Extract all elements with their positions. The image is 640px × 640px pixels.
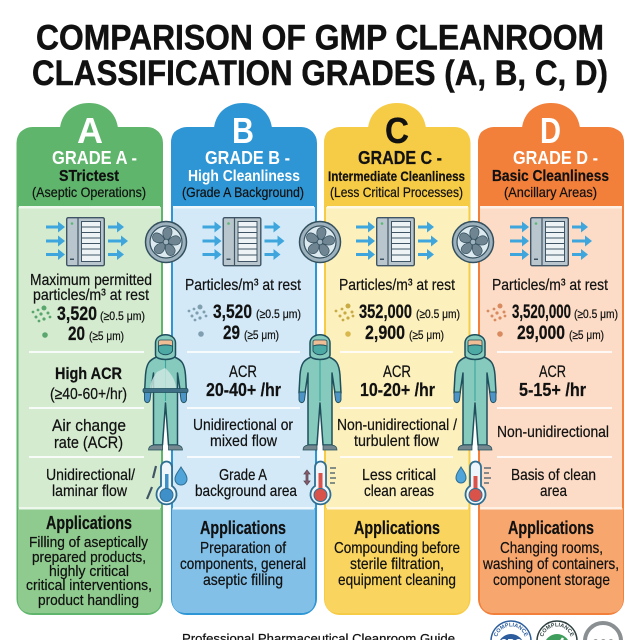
data: 352,000 C: 352,000 bbox=[359, 302, 412, 323]
data: 2,900 C: (≥5 μm) bbox=[409, 328, 444, 342]
text: ACR C: ACR bbox=[383, 362, 411, 381]
text: ACR C bbox=[360, 362, 435, 400]
applications C: equipment cleaning bbox=[338, 572, 456, 589]
applications C: Applications bbox=[354, 518, 440, 538]
applications B: aseptic filling bbox=[203, 572, 283, 589]
text: air change A: Air change bbox=[52, 416, 126, 435]
applications C: sterile filtration, bbox=[350, 556, 444, 573]
text: flow D: Non-unidirectional bbox=[497, 424, 609, 441]
header: grade B bbox=[171, 103, 316, 208]
figure: gowned operator C/D bbox=[454, 335, 496, 450]
icon: water drop A/B bbox=[175, 467, 187, 485]
applications D: component storage bbox=[493, 572, 610, 589]
text: flow A: Unidirectional/ bbox=[46, 467, 135, 484]
header: grade A: (Aseptic Operations) bbox=[32, 184, 146, 200]
data: 3,520 A bbox=[57, 304, 145, 325]
applications A: Filling of aseptically bbox=[29, 534, 148, 551]
applications A: product handling bbox=[38, 592, 139, 609]
text: ACR B: ACR bbox=[229, 362, 257, 381]
text: flow C: turbulent flow bbox=[354, 433, 439, 450]
header: grade D: Basic Cleanliness bbox=[492, 168, 609, 185]
applications D bbox=[480, 507, 623, 613]
data: 20 A bbox=[42, 324, 124, 345]
text: flow B: mixed flow bbox=[210, 433, 277, 450]
data: 3,520 A: 3,520 bbox=[57, 304, 97, 325]
text: area D: area bbox=[540, 483, 567, 500]
applications B bbox=[172, 507, 315, 613]
data: 29 B bbox=[198, 323, 279, 344]
applications B: Applications bbox=[200, 518, 286, 538]
icon: humidity arrow bbox=[304, 470, 310, 485]
text: ACR D bbox=[519, 362, 586, 400]
text: air change A bbox=[52, 416, 126, 452]
icon: fan B/C bbox=[300, 222, 340, 262]
text: area D: Basis of clean bbox=[511, 467, 596, 484]
header: grade D bbox=[478, 103, 624, 208]
header: grade C bbox=[324, 103, 470, 208]
text: flow B bbox=[193, 417, 294, 450]
badge: compliance CBC: COMPLIANCE bbox=[494, 622, 528, 637]
text: area C: clean areas bbox=[364, 483, 434, 500]
applications B: components, general bbox=[180, 556, 306, 573]
icon: HEPA filter D bbox=[510, 218, 592, 266]
header: grade B: GRADE B - bbox=[205, 148, 290, 168]
badge: compliance CBC bbox=[490, 620, 532, 640]
text: ACR A bbox=[50, 364, 127, 403]
data: 20 A: 20 bbox=[68, 324, 85, 345]
icon: HEPA filter A bbox=[46, 218, 128, 266]
text: maximum particles A bbox=[30, 272, 152, 304]
applications A bbox=[18, 507, 161, 613]
data: 3,520,000 D: (≥0.5 μm) bbox=[574, 307, 618, 321]
text: flow B: Unidirectional or bbox=[193, 417, 294, 434]
header: grade D: (Ancillary Areas) bbox=[504, 184, 597, 200]
text: ACR B bbox=[206, 362, 281, 400]
text: flow A bbox=[46, 467, 135, 500]
data: 29,000 D bbox=[497, 323, 604, 344]
header: grade D: D bbox=[540, 110, 561, 151]
applications A: Applications bbox=[46, 513, 132, 533]
icon: thermometer A/B bbox=[157, 462, 176, 504]
header: grade C: (Less Critical Processes) bbox=[330, 184, 463, 200]
icon: particle cluster B bbox=[188, 304, 207, 321]
badge: compliance GSC bbox=[585, 623, 621, 640]
data: 3,520 B bbox=[213, 302, 301, 323]
text: area B: background area bbox=[195, 483, 297, 500]
text: particles label C: Particles/m³ at rest bbox=[339, 277, 455, 294]
text: area D bbox=[511, 467, 596, 500]
data: 2,900 C: 2,900 bbox=[365, 323, 405, 344]
data: 3,520 B: 3,520 bbox=[213, 302, 252, 323]
data: 29,000 D: 29,000 bbox=[517, 323, 565, 344]
text: flow C bbox=[337, 417, 457, 450]
text: particles label B: Particles/m³ at rest bbox=[185, 277, 301, 294]
figure: gowned operator B/C bbox=[299, 335, 341, 450]
icon: thermometer C/D bbox=[466, 462, 491, 504]
icon: particle cluster C bbox=[335, 304, 354, 321]
text: ACR D: 5-15+ /hr bbox=[519, 380, 586, 400]
header: grade B: B bbox=[232, 110, 254, 151]
header: grade A: GRADE A - bbox=[52, 148, 137, 168]
text: ACR B: 20-40+ /hr bbox=[206, 380, 281, 400]
icon: fan C/D bbox=[452, 222, 494, 262]
text: area B bbox=[195, 467, 297, 500]
text: area B: Grade A bbox=[219, 467, 267, 484]
icon: thermometer B/C bbox=[311, 462, 336, 504]
applications D: Applications bbox=[508, 518, 594, 538]
text: ACR C: 10-20+ /hr bbox=[360, 380, 435, 400]
header: grade B: (Grade A Background) bbox=[182, 184, 304, 200]
data: 3,520 B: (≥0.5 μm) bbox=[256, 307, 301, 321]
text: ACR A: (≥40-60+/hr) bbox=[50, 386, 127, 403]
icon: particle cluster D bbox=[487, 304, 506, 321]
badge: compliance check bbox=[536, 620, 578, 640]
text: maximum particles A: Maximum permitted bbox=[30, 272, 152, 289]
figure: operator at workbench bbox=[143, 335, 188, 450]
data: 29 B: (≥5 μm) bbox=[244, 328, 279, 342]
header: grade D: GRADE D - bbox=[513, 148, 598, 168]
panel: grade D bbox=[478, 103, 624, 614]
applications A: highly critical bbox=[49, 563, 129, 580]
icon: HEPA filter B bbox=[202, 218, 284, 266]
icon: fan A/B bbox=[146, 222, 186, 262]
data: 352,000 C bbox=[359, 302, 460, 323]
header: grade A: STrictest bbox=[59, 168, 120, 185]
text: area C bbox=[362, 467, 436, 500]
header: grade B: High Cleanliness bbox=[188, 168, 300, 185]
data: 20 A: (≥5 μm) bbox=[89, 329, 124, 343]
icon: particle cluster A bbox=[32, 306, 51, 322]
data: 352,000 C: (≥0.5 μm) bbox=[416, 307, 460, 321]
header: grade A: A bbox=[77, 110, 103, 151]
text: flow C: Non-unidirectional / bbox=[337, 417, 457, 434]
applications C bbox=[325, 507, 469, 613]
data: 29 B: 29 bbox=[223, 323, 240, 344]
applications A: critical interventions, bbox=[26, 577, 152, 594]
title bbox=[32, 18, 608, 93]
badge: compliance check: COMPLIANCE bbox=[540, 622, 574, 637]
text: maximum particles A: particles/m³ at rest bbox=[33, 287, 149, 304]
header: grade C: Intermediate Cleanliness bbox=[328, 168, 465, 184]
text: air change A: rate (ACR) bbox=[54, 433, 123, 452]
icon: airflow marks bbox=[147, 466, 156, 499]
text: ACR D: ACR bbox=[539, 362, 566, 381]
panel: grade A bbox=[17, 103, 162, 614]
text: area C: Less critical bbox=[362, 467, 436, 484]
header: grade A bbox=[17, 103, 162, 208]
applications D: washing of containers, bbox=[482, 556, 619, 573]
data: 3,520,000 D: 3,520,000 bbox=[512, 302, 571, 323]
data: 3,520 A: (≥0.5 μm) bbox=[100, 309, 145, 323]
data: 29,000 D: (≥5 μm) bbox=[569, 328, 604, 342]
icon: HEPA filter C bbox=[356, 218, 438, 266]
header: grade C: C bbox=[385, 110, 409, 151]
applications B: Preparation of bbox=[200, 540, 286, 557]
panel: grade B bbox=[171, 103, 316, 614]
applications D: Changing rooms, bbox=[500, 540, 603, 557]
header: grade C: GRADE C - bbox=[358, 148, 442, 168]
text: flow A: laminar flow bbox=[52, 483, 127, 500]
applications C: Compounding before bbox=[334, 540, 460, 557]
data: 2,900 C bbox=[345, 323, 444, 344]
icon: water drop C/D bbox=[456, 467, 466, 483]
text: ACR A: High ACR bbox=[55, 364, 122, 383]
text: particles label D: Particles/m³ at rest bbox=[492, 277, 608, 294]
applications A: prepared products, bbox=[32, 549, 146, 566]
panel: grade C bbox=[324, 103, 470, 614]
